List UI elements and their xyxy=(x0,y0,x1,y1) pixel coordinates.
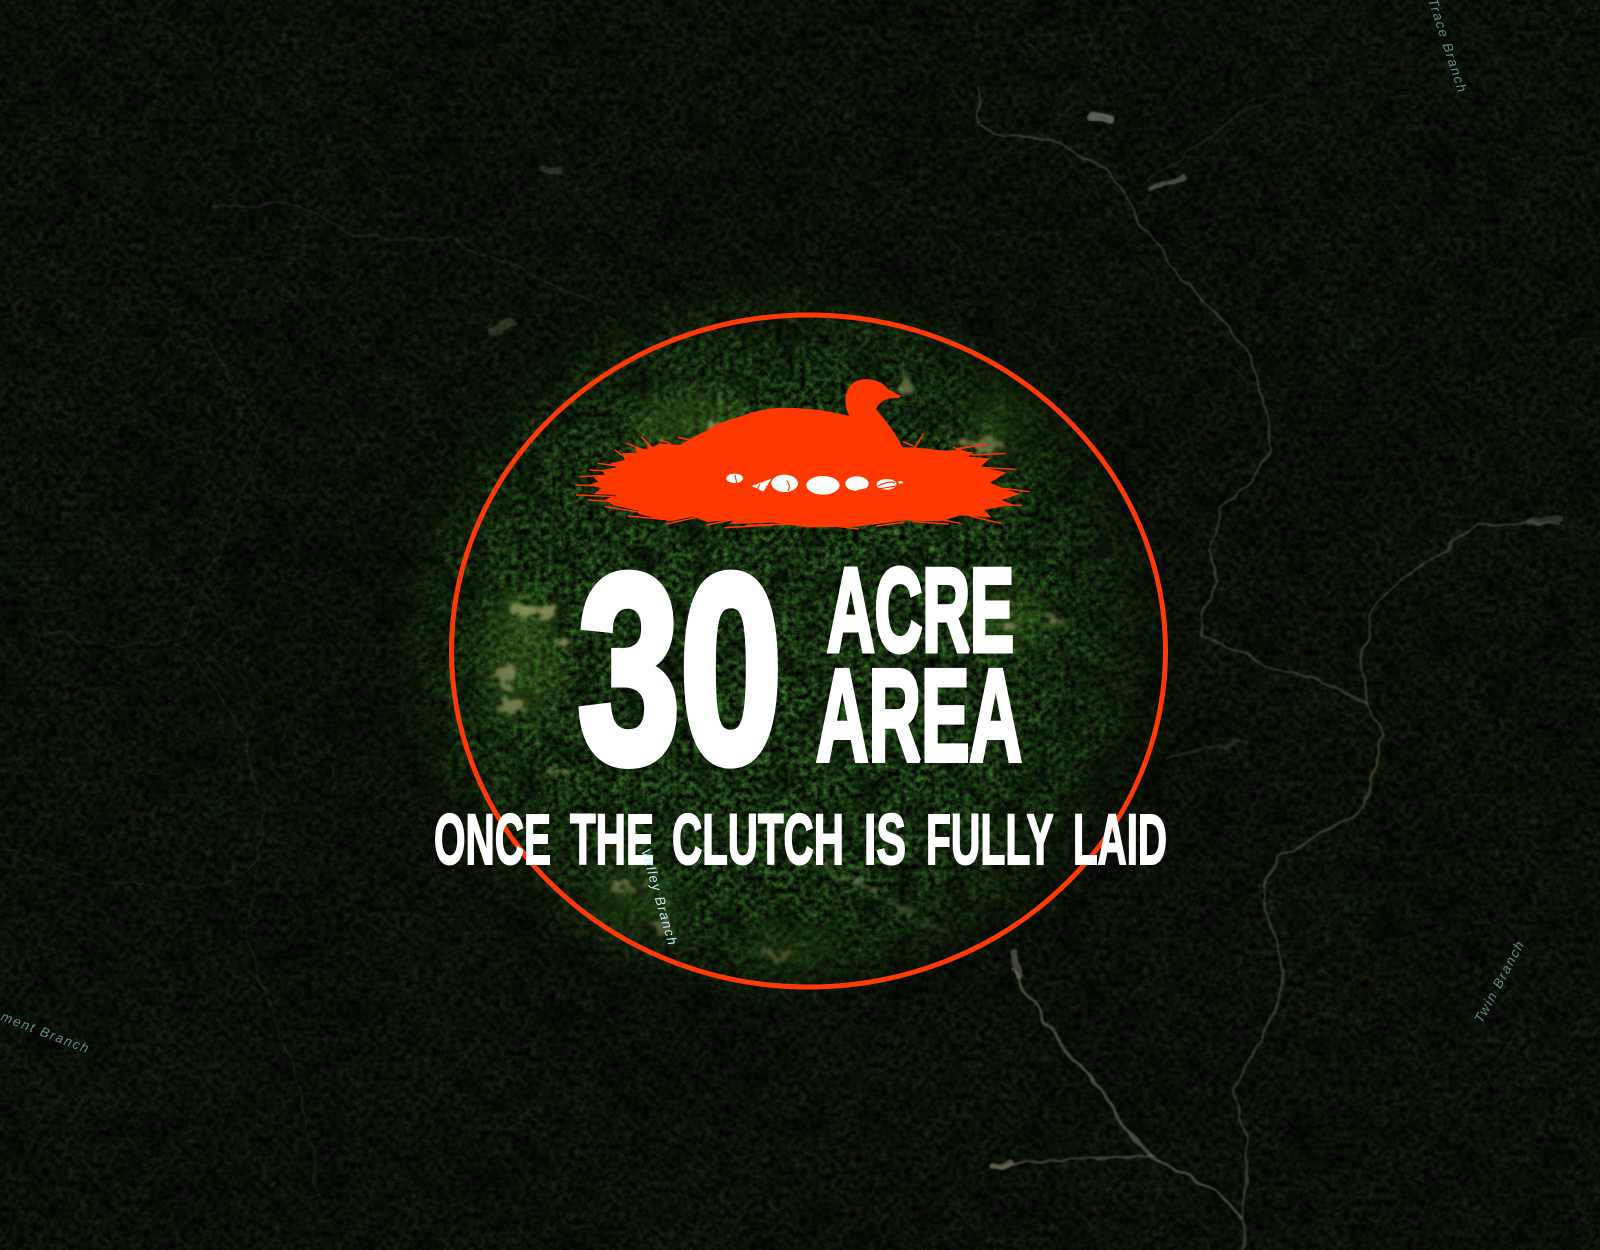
map label: Valley Branch: Valley Branch xyxy=(638,847,680,948)
icon: bird on nest with eggs xyxy=(576,379,1029,529)
subheading: once the clutch is fully laid: IS xyxy=(864,801,906,880)
bird and nest silhouette xyxy=(588,379,1020,527)
pond inside the circle xyxy=(1096,542,1114,558)
map label: Twin Branch: Twin Branch xyxy=(1471,937,1528,1025)
green glow around clearings xyxy=(480,380,1050,970)
big number 30: 30 xyxy=(578,519,782,818)
subheading: once the clutch is fully laid: THE xyxy=(570,801,654,880)
subheading: once the clutch is fully laid: LAID xyxy=(1073,801,1167,880)
heading: AREA: AREA xyxy=(816,642,1022,788)
clearings in the forest canopy xyxy=(491,373,1063,959)
bright spotlight forest inside the circle xyxy=(400,283,1150,993)
heading: ACRE: ACRE xyxy=(827,544,1014,677)
subheading: once the clutch is fully laid: ONCE xyxy=(434,801,551,880)
nest straw strokes xyxy=(576,434,1029,529)
subheading: once the clutch is fully laid: FULLY xyxy=(926,801,1054,880)
orange circle outline xyxy=(452,315,1166,987)
map label: ment Branch: ment Branch xyxy=(0,1009,92,1057)
egg shadows xyxy=(735,475,897,491)
subheading: once the clutch is fully laid: CLUTCH xyxy=(672,801,844,880)
eggs xyxy=(726,474,903,495)
